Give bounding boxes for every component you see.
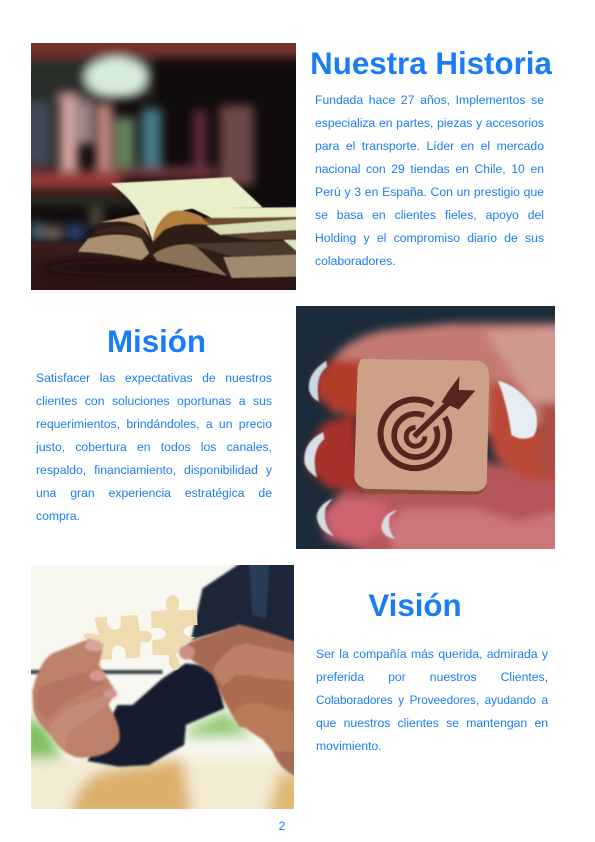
title: Nuestra Historia: Nuestra Historia <box>310 46 552 81</box>
text block: visión <box>316 647 548 753</box>
text block: misión: una gran experiencia estratégica de <box>36 486 272 500</box>
text block: visión: preferida por nuestros Clientes, <box>316 670 548 684</box>
text block: visión: que nuestros clientes se mantengan en <box>316 716 548 730</box>
text block: historia: Perú y 3 en España. Con un prestigio que <box>315 185 544 199</box>
text block: historia: para el transporte. Líder en el mercado <box>315 139 544 153</box>
icon: target and arrow <box>381 376 475 468</box>
heading: Misión: Misión <box>107 324 206 359</box>
photo: open book in library <box>31 43 296 290</box>
text block: misión: Satisfacer las expectativas de nuestros <box>36 371 272 385</box>
puzzle pieces <box>83 595 198 670</box>
nails <box>304 361 537 539</box>
right hand <box>179 624 299 778</box>
text block: historia: se basa en clientes fieles, apoyo del <box>315 208 544 222</box>
text block: misión: compra. <box>36 509 80 523</box>
text block: historia: Holding y el compromiso diario de sus <box>315 231 544 245</box>
text block: visión: Colaboradores y Proveedores, ayudando a <box>316 694 548 707</box>
text block: historia: Fundada hace 27 años, Implementos se <box>315 93 544 107</box>
text block: historia: colaboradores. <box>315 254 396 268</box>
text block: misión: clientes con soluciones oportunas a sus <box>36 394 272 408</box>
text block: historia: nacional con 29 tiendas en Chile, 10 en <box>315 162 544 176</box>
photo: hand holding wooden target block <box>296 306 555 549</box>
text block: visión: Ser la compañía más querida, admirada y <box>316 647 548 661</box>
text block: visión: movimiento. <box>316 739 382 753</box>
heading: Visión: Visión <box>368 588 462 623</box>
text block: historia <box>315 93 544 268</box>
text block: misión: respaldo, financiamiento, disponibilidad y <box>36 463 272 477</box>
text block: misión: requerimientos, brindándoles, a un precio <box>36 417 272 431</box>
photo: hands joining puzzle pieces <box>31 565 294 809</box>
text block: misión <box>36 371 272 523</box>
text block: misión: justo, cobertura en todos los canales, <box>36 440 272 454</box>
text block: historia: especializa en partes, piezas y accesorios <box>315 116 544 130</box>
page number: 2 <box>279 819 285 833</box>
left hand <box>32 639 120 758</box>
